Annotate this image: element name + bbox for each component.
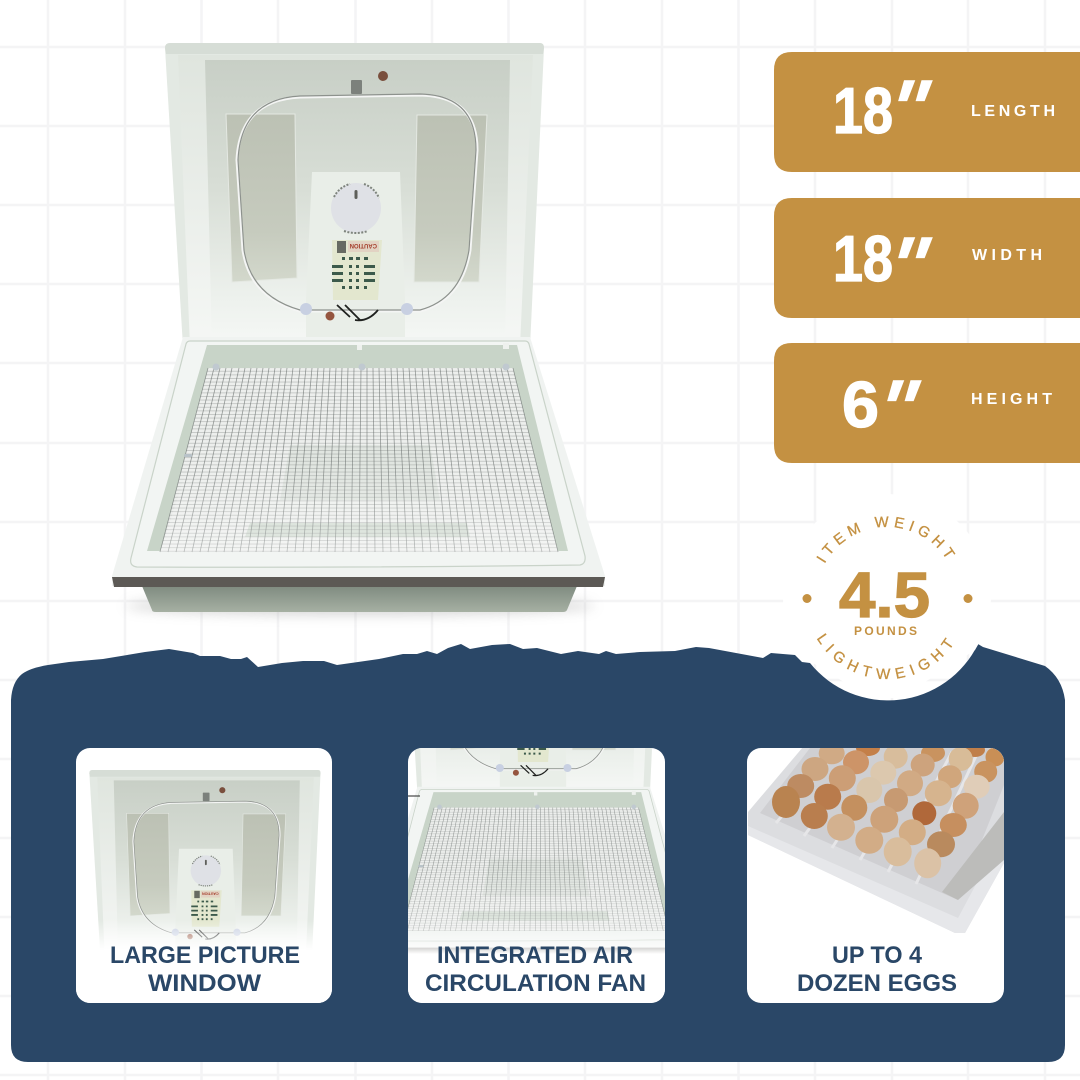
dimension bar: height: HEIGHT <box>971 391 1052 408</box>
card: large picture window: WINDOW <box>148 970 262 997</box>
card: large picture window <box>76 748 332 1003</box>
badge: item weight: LIGHTWEIGHT <box>816 633 952 680</box>
incubator tray <box>112 337 605 612</box>
dimension bar: length: 18 <box>833 74 893 147</box>
card: integrated air circulation fan <box>408 748 665 1003</box>
dimension bar: height: 6 <box>842 368 879 441</box>
fan <box>331 183 381 233</box>
card: up to 4 dozen eggs: DOZEN EGGS <box>797 970 957 997</box>
dimension bar: width: WIDTH <box>972 247 1042 264</box>
dimension bar: length: " <box>881 62 935 156</box>
dimension bar: length <box>774 52 1080 172</box>
tray shadow <box>125 597 595 615</box>
eggs <box>772 740 1004 878</box>
panel: navy feature panel <box>11 644 1065 1062</box>
card: integrated air circulation fan: INTEGRATED AIR <box>437 942 633 969</box>
badge: item weight: 4.5 <box>839 559 930 631</box>
card: large picture window: LARGE PICTURE <box>110 942 300 969</box>
card: up to 4 dozen eggs <box>747 740 1004 1003</box>
dimension bar: width: 18 <box>833 222 893 295</box>
product photo: open incubator <box>112 43 605 615</box>
control box <box>332 240 382 300</box>
incubator lid <box>165 43 544 347</box>
card: up to 4 dozen eggs: UP TO 4 <box>832 942 922 969</box>
dimension bar: height: " <box>870 362 924 456</box>
control box: CAUTION <box>350 242 377 248</box>
badge: item weight: ITEM WEIGHT <box>816 516 956 563</box>
egg tray <box>748 747 1004 933</box>
heater loop <box>237 94 477 320</box>
vent windows <box>226 114 297 282</box>
wire mesh floor <box>160 368 558 552</box>
dimension bar: width: " <box>881 219 935 313</box>
badge: item weight: POUNDS <box>854 624 917 638</box>
dimension bar: width <box>774 198 1080 318</box>
control plate <box>306 172 405 340</box>
card: integrated air circulation fan: CIRCULATION FAN <box>425 970 646 997</box>
dimension bar: length: LENGTH <box>971 103 1055 120</box>
badge: item weight <box>783 494 990 698</box>
dimension bar: height <box>774 343 1080 463</box>
